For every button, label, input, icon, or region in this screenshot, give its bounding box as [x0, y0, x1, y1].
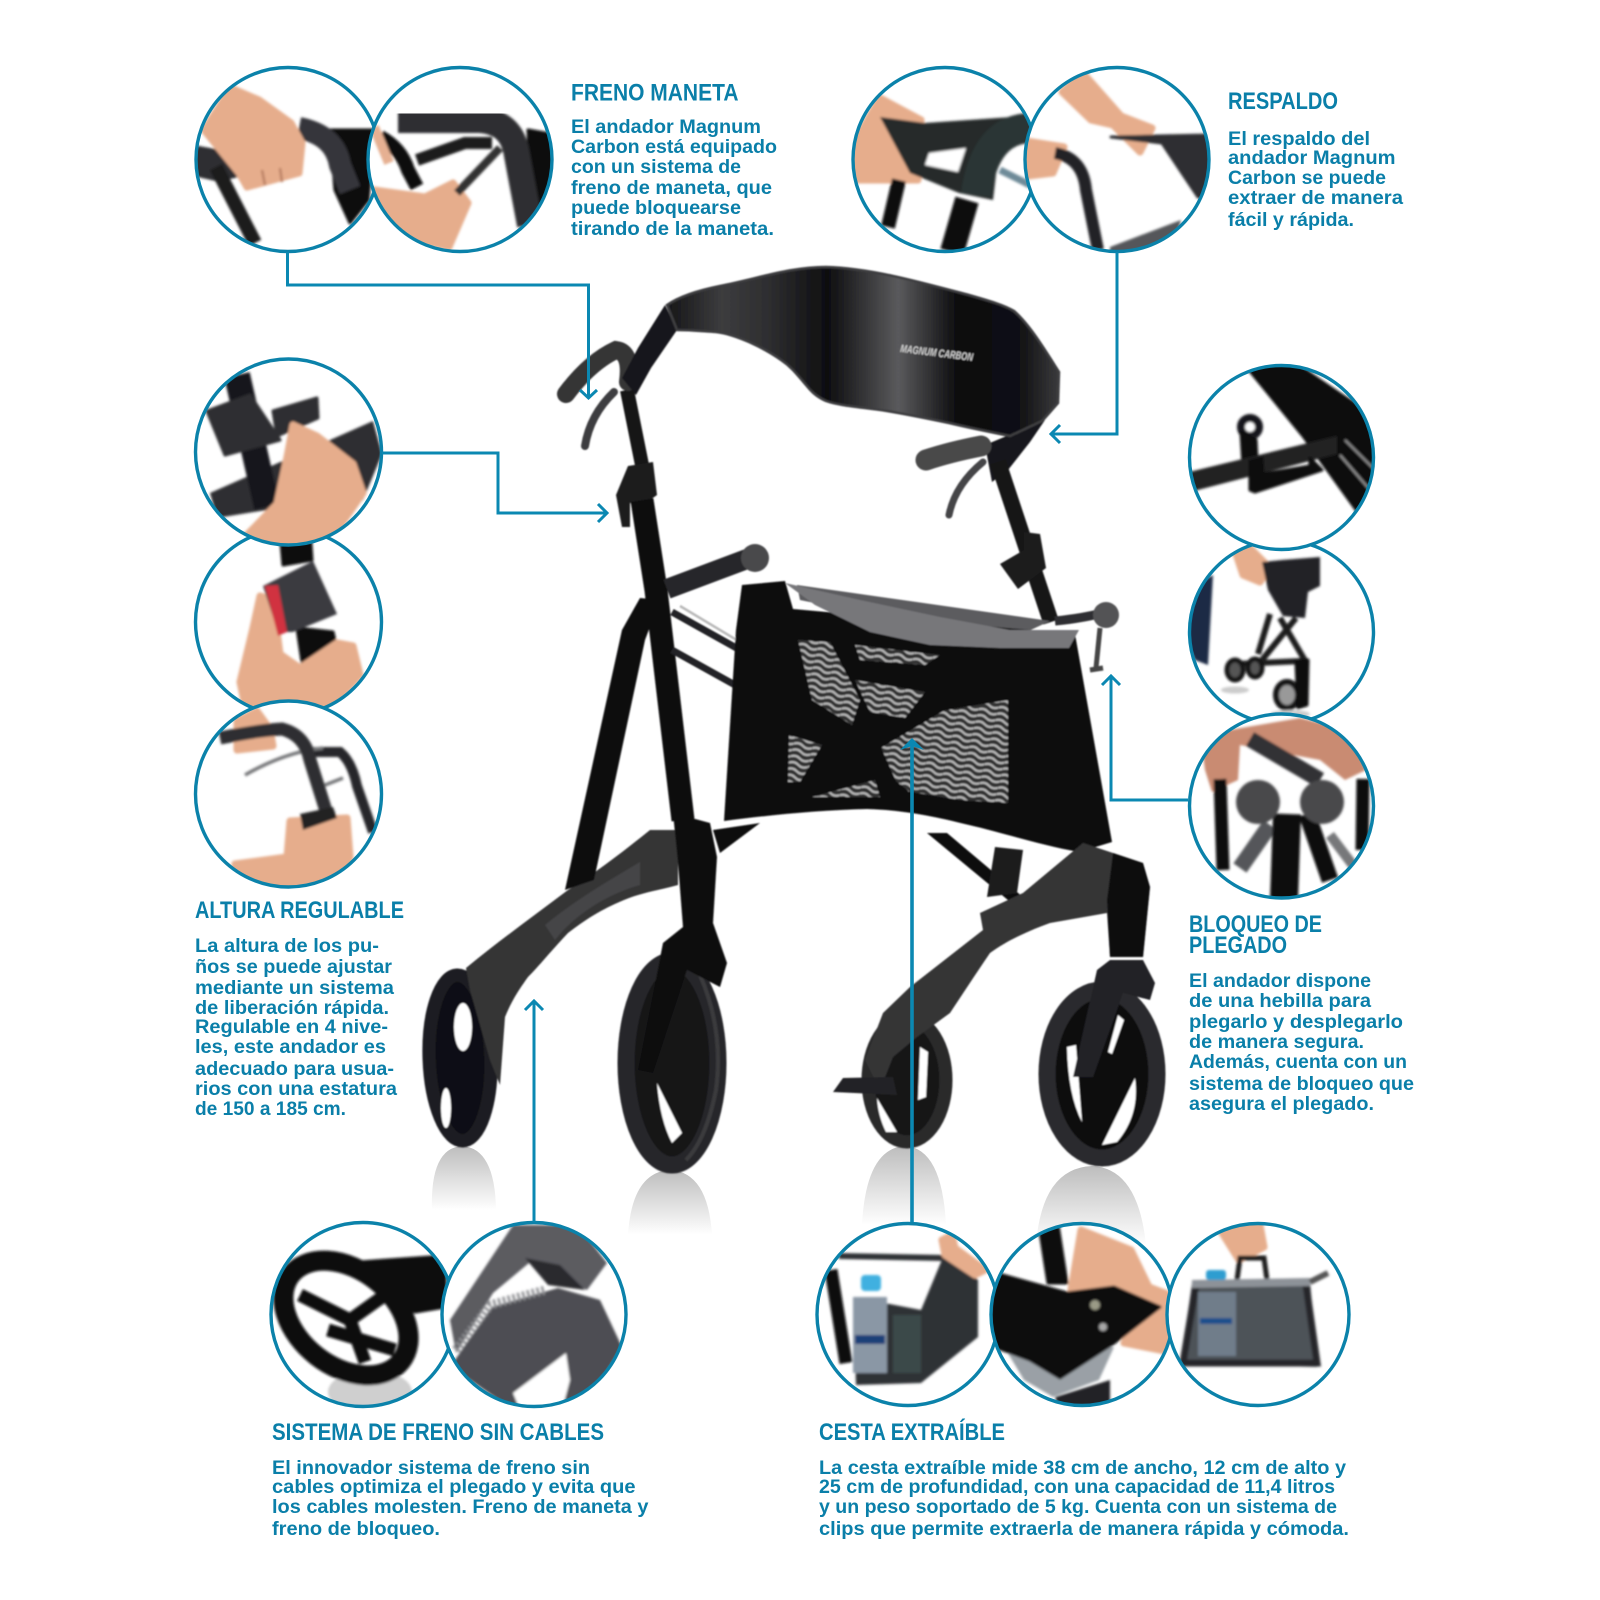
brake pedal	[833, 1077, 897, 1095]
basket mesh panels	[788, 640, 1008, 803]
photo: person lifting backrest off	[1020, 68, 1210, 260]
text: bloqueo de plegado: Además, cuenta con un	[1189, 1051, 1407, 1073]
text: altura regulable: rios con una estatura	[195, 1078, 397, 1100]
front right wheel	[1047, 990, 1157, 1158]
left arm highlight	[545, 862, 640, 940]
text: cesta extraible: clips que permite extraerla de manera rápida y cómoda.	[819, 1518, 1349, 1540]
seat behind basket	[797, 585, 1050, 642]
text: altura regulable: Regulable en 4 nive-	[195, 1016, 388, 1038]
left a-frame legs	[565, 598, 660, 890]
heading: bloqueo de plegado: BLOQUEO DE	[1189, 911, 1322, 938]
arrow: bloqueo de plegado	[1102, 676, 1188, 800]
text: bloqueo de plegado	[1189, 970, 1414, 1115]
photo: rear wheel close-up	[261, 1222, 455, 1414]
right frame arm	[865, 843, 1150, 1090]
photo: hands on folded seat caps	[1190, 714, 1374, 900]
text: respaldo: fácil y rápida.	[1228, 209, 1354, 231]
left front post and fork	[638, 813, 727, 1073]
heading: respaldo: RESPALDO	[1228, 88, 1338, 115]
basket	[724, 581, 1112, 852]
right upper post	[998, 462, 1051, 622]
right post dark	[1107, 853, 1150, 957]
text: bloqueo de plegado: El andador dispone	[1189, 970, 1371, 992]
photo: brake on tyre close-up	[442, 1222, 626, 1410]
walker illustration	[426, 267, 1157, 1165]
text: freno maneta: freno de maneta, que	[571, 177, 772, 199]
heading: altura regulable: ALTURA REGULABLE	[195, 897, 404, 924]
text: bloqueo de plegado: asegura el plegado.	[1189, 1093, 1374, 1115]
text: freno maneta: tirando de la maneta.	[571, 218, 774, 240]
photo: hands undoing basket clips	[990, 1224, 1175, 1410]
text: altura regulable: adecuado para usua-	[195, 1058, 394, 1080]
left lower post	[642, 500, 683, 820]
text: cesta extraible: 25 cm de profundidad, con una capacidad de 11,4 litros	[819, 1476, 1335, 1498]
left handle grip	[566, 350, 629, 394]
text: altura regulable: La altura de los pu-	[195, 935, 379, 957]
text: altura regulable: mediante un sistema	[195, 977, 394, 999]
text: sistema de freno sin cables: cables optimiza el plegado y evita que	[272, 1476, 636, 1498]
photo: adjusting handle height	[196, 701, 382, 890]
text: bloqueo de plegado: de una hebilla para	[1189, 990, 1371, 1012]
text: sistema de freno sin cables	[272, 1457, 649, 1540]
heading: sistema de freno sin cables: SISTEMA DE FRENO SIN CABLES	[272, 1419, 604, 1446]
text: bloqueo de plegado: plegarlo y desplegarlo	[1189, 1011, 1403, 1033]
backrest logo: MAGNUM CARBON	[900, 343, 974, 364]
text: respaldo	[1228, 128, 1403, 231]
text: cesta extraible	[819, 1457, 1349, 1540]
photo: removed basket carried by hand	[1167, 1224, 1349, 1406]
basket cross straps	[785, 680, 985, 798]
front left wheel	[626, 961, 718, 1165]
left upper post	[627, 390, 642, 465]
text: sistema de freno sin cables: freno de bloqueo.	[272, 1518, 440, 1540]
heading: cesta extraible: CESTA EXTRAÍBLE	[819, 1418, 1005, 1446]
text: freno maneta: con un sistema de	[571, 156, 741, 178]
photo: folding lock hook	[1185, 540, 1374, 724]
heading: bloqueo de plegado: PLEGADO	[1189, 932, 1287, 959]
text: respaldo: Carbon se puede	[1228, 167, 1386, 189]
text: altura regulable	[195, 935, 397, 1120]
text: sistema de freno sin cables: El innovador sistema de freno sin	[272, 1457, 590, 1479]
backrest right joint	[985, 420, 1045, 482]
text: freno maneta: El andador Magnum	[571, 116, 761, 138]
text: freno maneta: Carbon está equipado	[571, 136, 777, 158]
text: altura regulable: les, este andador es	[195, 1036, 386, 1058]
text: altura regulable: de liberación rápida.	[195, 997, 389, 1019]
right front fork	[1073, 960, 1155, 1077]
text: freno maneta: puede bloquearse	[571, 197, 741, 219]
right height collar	[1000, 532, 1046, 589]
heading: freno maneta: FRENO MANETA	[571, 80, 738, 106]
arrow: sistema de freno	[525, 1001, 543, 1222]
rear right wheel	[868, 1018, 946, 1142]
rear left wheel	[426, 974, 494, 1142]
left frame arm	[466, 830, 678, 1085]
text: bloqueo de plegado: sistema de bloqueo que	[1189, 1073, 1414, 1095]
text: freno maneta	[571, 116, 777, 240]
under basket struts	[713, 823, 1030, 910]
left brake lever	[585, 392, 614, 446]
text: altura regulable: ños se puede ajustar	[195, 956, 392, 978]
arrow: freno maneta	[288, 252, 597, 398]
photo: thumb on height clamp	[196, 359, 382, 545]
backrest left arm	[622, 305, 677, 395]
text: respaldo: extraer de manera	[1228, 187, 1403, 209]
text: cesta extraible: La cesta extraíble mide 38 cm de ancho, 12 cm de alto y	[819, 1457, 1346, 1479]
height collar	[616, 462, 657, 527]
right brake lever	[949, 462, 983, 515]
photo: hand squeezing brake handle	[196, 68, 380, 252]
photo: hand pulling brake lever	[368, 68, 556, 252]
text: bloqueo de plegado: de manera segura.	[1189, 1031, 1364, 1053]
arrow: respaldo	[1051, 252, 1117, 443]
text: altura regulable: de 150 a 185 cm.	[195, 1098, 346, 1120]
text: respaldo: El respaldo del	[1228, 128, 1370, 150]
arrow: cesta extraible	[900, 738, 924, 1222]
center stem	[987, 847, 1023, 897]
text: respaldo: andador Magnum	[1228, 147, 1396, 169]
arrow: altura regulable	[382, 453, 607, 522]
seat rail right and hook	[1055, 602, 1119, 670]
heading: bloqueo de plegado	[1189, 911, 1322, 959]
seat rail left with cap	[667, 544, 769, 685]
photo: hand removing backrest clip	[850, 68, 1040, 252]
photo: folding hook detail	[1185, 360, 1380, 550]
right handle grip	[926, 446, 981, 460]
photo: red height release button	[196, 529, 382, 715]
text: sistema de freno sin cables: los cables molesten. Freno de maneta y	[272, 1496, 649, 1518]
photo: basket fitted on the walker	[817, 1224, 999, 1406]
backrest	[667, 267, 1059, 436]
basket top band	[785, 583, 1079, 648]
wheel floor reflections	[432, 1146, 1146, 1245]
text: cesta extraible: y un peso soportado de 5 kg. Cuenta con un sistema de	[819, 1496, 1337, 1518]
